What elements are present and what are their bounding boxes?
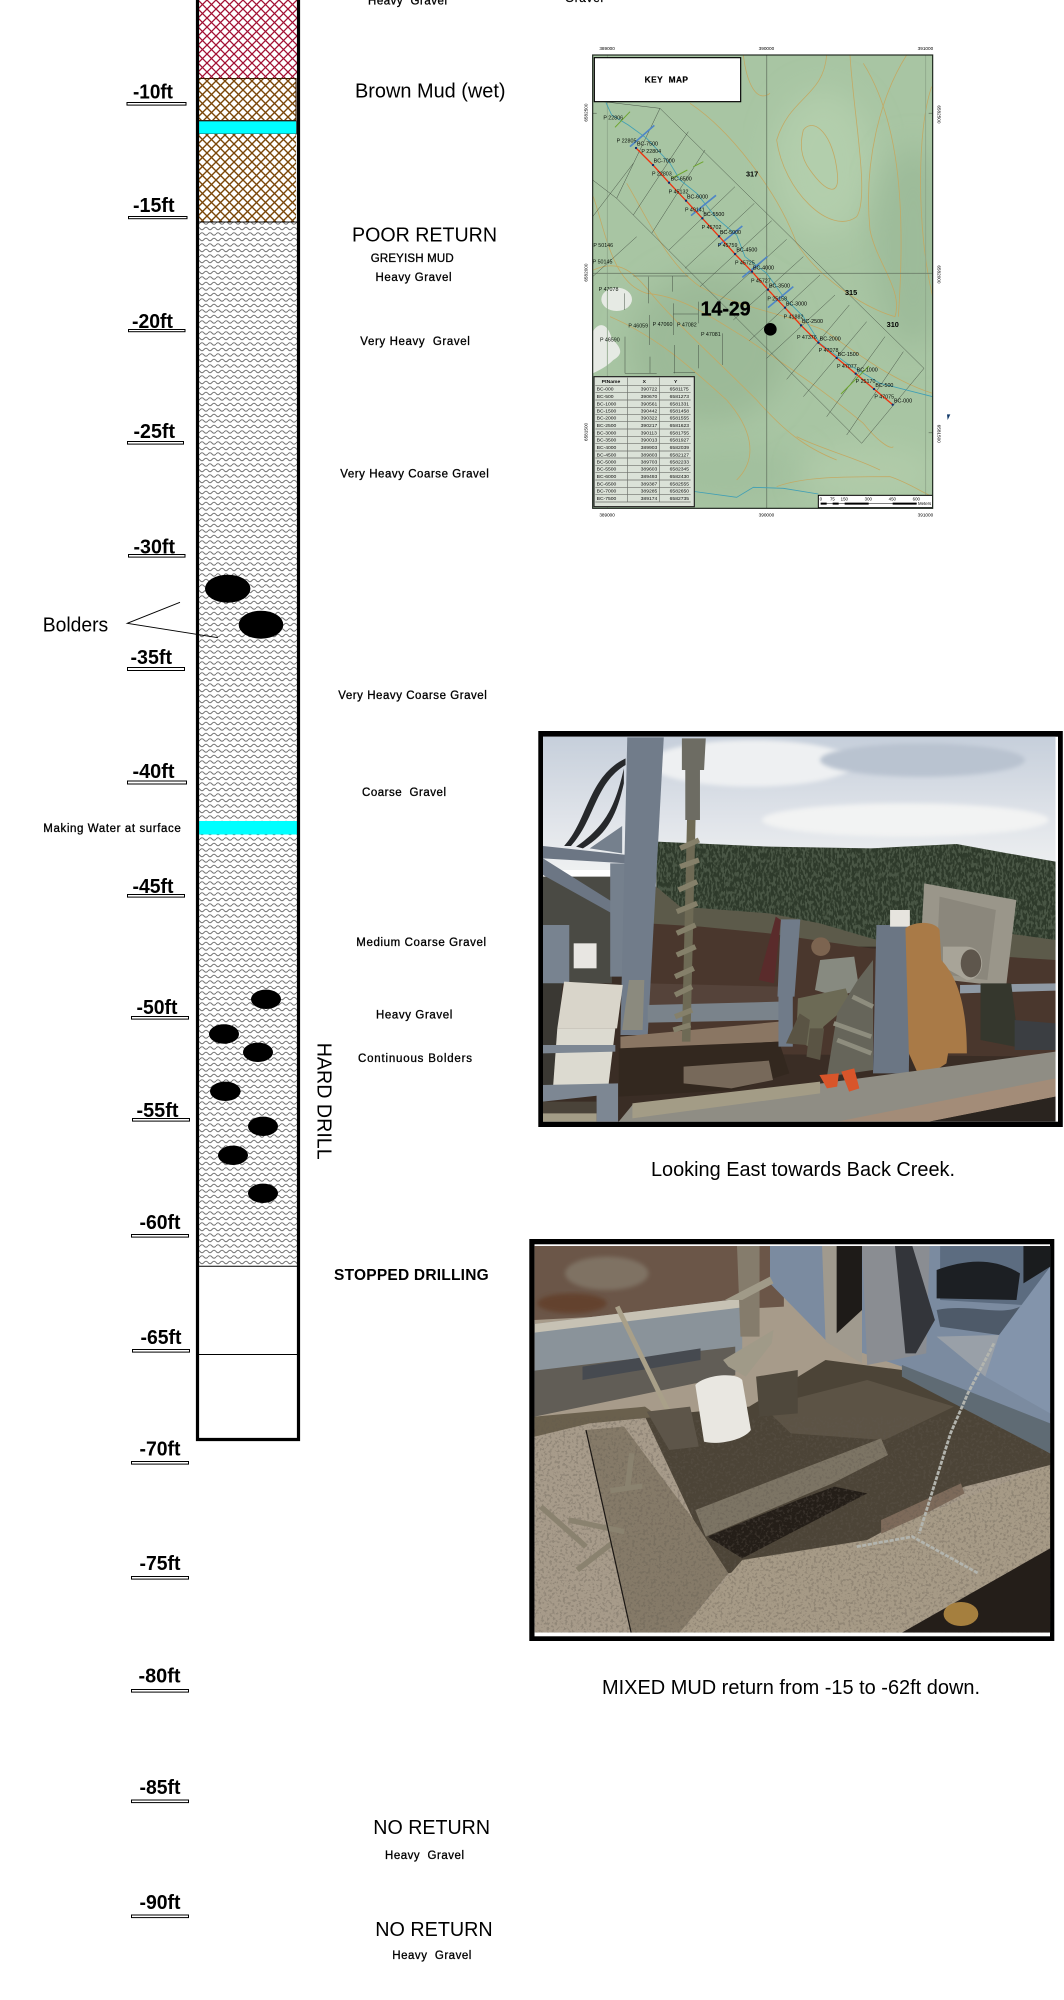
coordinates table: 6582735 (670, 496, 689, 502)
claim labels: P 47376 (797, 335, 817, 341)
coordinates table: 390217 (641, 423, 658, 429)
label: hard drill: HARD DRILL (312, 1043, 334, 1160)
scale bar (818, 495, 933, 508)
depth -20ft: -20ft (132, 311, 173, 333)
coordinates table: 6581623 (670, 423, 689, 429)
depth -75ft: -75ft (140, 1553, 181, 1575)
claim labels: P 45759 (718, 243, 737, 249)
drill hole marker (764, 323, 777, 336)
wood plank (680, 1465, 1050, 1633)
mud slab (695, 1438, 888, 1537)
note: no return second: NO RETURN (375, 1919, 493, 1941)
station labels (637, 142, 912, 405)
depth -70ft (132, 1439, 188, 1464)
coordinates table: 389903 (641, 445, 658, 451)
coordinates table: 389285 (641, 489, 658, 495)
coordinates table: BC-4500 (597, 452, 617, 458)
mud speckle (535, 1417, 1050, 1633)
coordinates table: 389387 (641, 481, 658, 487)
coordinates table: BC-5000 (597, 459, 617, 465)
depth -80ft: -80ft (138, 1666, 181, 1688)
coordinates table: 389703 (641, 459, 658, 465)
hole number: 14-29 (701, 299, 751, 321)
column walls (198, 0, 298, 1440)
layer: red mud (197, 0, 298, 78)
depth -10ft: -10ft (133, 82, 173, 104)
coordinates table: 390722 (641, 387, 658, 393)
claim labels: P 50145 (593, 259, 612, 265)
coordinates table: BC-3000 (597, 430, 617, 436)
depth scale (127, 82, 190, 1918)
coordinates table: 389174 (641, 496, 658, 502)
coordinates table: 389603 (641, 467, 658, 473)
claim labels: P 47077 (837, 364, 857, 370)
claim labels: P 46059 (628, 324, 648, 330)
coordinates table: BC-000 (597, 387, 614, 393)
concrete box (919, 883, 1016, 987)
coordinates table: BC-6500 (597, 481, 617, 487)
drill column (196, 0, 298, 1440)
claim labels: P 45702 (702, 225, 721, 231)
coordinates table: 389803 (641, 452, 658, 458)
coordinates table: Y (674, 379, 678, 385)
scale bar: 300 (865, 497, 872, 502)
coordinates table: 6581331 (670, 401, 689, 407)
map coordinate ticks (583, 46, 942, 518)
chain (857, 1343, 994, 1573)
scale bar: 75 (830, 497, 835, 502)
coordinates table: 390322 (641, 416, 658, 422)
key map title box (594, 58, 741, 102)
claim labels: P 25158 (767, 296, 787, 302)
left frame (543, 1045, 618, 1122)
station labels: BC-5000 (720, 230, 741, 236)
depth -90ft: -90ft (140, 1892, 181, 1914)
depth -75ft (132, 1553, 188, 1579)
depth -40ft (128, 761, 186, 784)
worker (786, 937, 859, 1060)
forested hill (656, 842, 1056, 947)
scale bar: 600 (913, 497, 920, 502)
station labels: BC-6500 (671, 177, 692, 183)
depth -40ft: -40ft (132, 761, 175, 783)
claim labels: P 45727 (751, 279, 771, 285)
key map title box: KEY MAP (645, 75, 688, 85)
claim labels: P 46590 (600, 337, 620, 343)
depth -30ft: -30ft (134, 536, 175, 558)
coordinates table: 6582127 (670, 452, 689, 458)
coordinates table: BC-6000 (597, 474, 617, 480)
depth -55ft: -55ft (136, 1100, 179, 1122)
note: medium coarse gravel: Medium Coarse Gravel (356, 937, 486, 949)
claim labels: P 45725 (735, 261, 755, 267)
claim labels: P 45132 (669, 189, 688, 195)
caption: mixed mud: MIXED MUD return from -15 to -62ft down. (602, 1677, 980, 1699)
layer: brown mud lower (197, 134, 296, 222)
scale bar: 450 (889, 497, 896, 502)
coordinates table: BC-2000 (597, 416, 617, 422)
note: heavy gravel second: Heavy Gravel (392, 1950, 471, 1962)
callout: bolders: Bolders (43, 615, 108, 637)
coordinates table: 390670 (641, 394, 658, 400)
note: coarse gravel: Coarse Gravel (362, 787, 446, 799)
claim lines (593, 102, 924, 443)
brush (654, 886, 876, 947)
depth -35ft (128, 647, 184, 670)
centre post (777, 919, 800, 1047)
left machine (543, 877, 612, 983)
note: poor return: POOR RETURN (352, 225, 497, 247)
map coordinate ticks: 390000 (759, 46, 775, 51)
coordinates table: 6582233 (670, 459, 689, 465)
tools (541, 1453, 642, 1570)
claim labels: P 47078 (599, 287, 618, 293)
station labels: BC-1000 (857, 368, 878, 374)
station labels: BC-7500 (637, 142, 658, 148)
coordinates table: 6581273 (670, 394, 689, 400)
depth -15ft (128, 195, 187, 219)
block numbers (746, 170, 899, 329)
drilling notes (334, 0, 603, 1962)
note: heavy gravel mid: Heavy Gravel (376, 1009, 452, 1021)
callout: bolders (43, 602, 218, 638)
coordinates table: BC-2500 (597, 423, 617, 429)
coordinates table: 6581458 (670, 409, 689, 415)
survey line (636, 148, 893, 405)
photo: mixed mud return (529, 1239, 1054, 1641)
white bucket (695, 1375, 751, 1443)
claim labels: P 41882 (784, 314, 803, 320)
brown jacket (905, 923, 967, 1080)
station labels: BC-1500 (838, 352, 859, 358)
depth -65ft (132, 1327, 190, 1352)
coordinates table: 6582345 (670, 467, 689, 473)
soil background (535, 1246, 784, 1320)
station labels: BC-6000 (687, 194, 708, 200)
claim labels: P 50146 (593, 243, 613, 249)
map coordinate ticks: 6581500 (937, 425, 942, 443)
map grid (607, 55, 926, 508)
depth -10ft (127, 82, 186, 105)
scale bar: 150 (841, 497, 848, 502)
claim labels: P 22806 (603, 116, 623, 122)
coordinates table: 6582430 (670, 474, 689, 480)
depth -70ft: -70ft (140, 1439, 181, 1461)
coordinates table: 6581175 (670, 387, 689, 393)
coordinates table: BC-500 (597, 394, 614, 400)
shovel (617, 1307, 668, 1410)
station labels: BC-500 (875, 383, 893, 389)
station labels: BC-000 (894, 399, 912, 405)
pipes (648, 1002, 779, 1023)
depth -45ft: -45ft (132, 876, 174, 898)
snow patches (601, 288, 632, 311)
depth -60ft (132, 1212, 188, 1237)
coordinates table: X (643, 379, 647, 385)
key map (583, 46, 953, 518)
right rail and black jacket (960, 983, 1056, 993)
pipe (535, 1298, 742, 1417)
claim labels: P 22803 (652, 172, 672, 178)
depth -85ft: -85ft (140, 1777, 181, 1799)
station labels: BC-5500 (703, 212, 724, 218)
coordinates table: 390013 (641, 438, 658, 444)
note: stopped drilling: STOPPED DRILLING (334, 1267, 489, 1284)
layer: brown mud upper (197, 78, 296, 120)
photo: looking east (538, 731, 1063, 1127)
boulders upper (205, 575, 283, 639)
note: no return first: NO RETURN (373, 1817, 490, 1839)
depth -35ft: -35ft (130, 647, 172, 669)
map coordinate ticks: 389000 (599, 46, 615, 51)
claim labels (593, 116, 894, 401)
layer boundaries (197, 222, 297, 1354)
depth -85ft (132, 1777, 188, 1803)
scale bar: Meters (918, 501, 931, 506)
claim labels: P 47082 (677, 322, 697, 328)
claim labels: P 47060 (653, 322, 672, 328)
claim labels: P 47078 (819, 348, 838, 354)
coordinates table: 6581755 (670, 430, 689, 436)
ground (648, 923, 1056, 1057)
map coordinate ticks: 6582000 (937, 265, 942, 284)
station labels: BC-7000 (654, 159, 675, 165)
plank seam (586, 1430, 631, 1633)
contours (593, 55, 933, 507)
station labels: BC-3000 (786, 301, 807, 307)
note: heavy gravel: Heavy Gravel (376, 272, 452, 284)
map coordinate ticks: 6582500 (583, 103, 588, 122)
claim labels: P 47075 (874, 395, 894, 401)
coordinates table (594, 377, 694, 507)
coordinates table: BC-7500 (597, 496, 617, 502)
block numbers: 317 (746, 170, 758, 179)
map coordinate ticks: 6581500 (583, 422, 588, 441)
depth -90ft (132, 1892, 188, 1918)
coordinates table: BC-5500 (597, 467, 617, 473)
auger (682, 738, 706, 820)
coordinates table: BC-4000 (597, 445, 617, 451)
station labels: BC-3500 (769, 284, 790, 290)
caption: looking east: Looking East towards Back Creek. (651, 1159, 955, 1181)
map coordinate ticks: 6582000 (583, 263, 588, 282)
note: very heavy coarse gravel: Very Heavy Coarse Gravel (340, 468, 489, 480)
crossing lines (630, 125, 793, 308)
mast (620, 737, 664, 1035)
coordinates table: 389493 (641, 474, 658, 480)
dark ground (620, 1042, 784, 1054)
depth -50ft: -50ft (136, 997, 178, 1019)
map coordinate ticks: 391000 (918, 513, 934, 518)
block numbers: 310 (887, 320, 899, 329)
north arrow fragment (947, 414, 950, 420)
bucket (543, 983, 562, 1087)
station labels: BC-2000 (820, 337, 841, 343)
ground mud (645, 1360, 1050, 1573)
depth -60ft: -60ft (140, 1212, 181, 1234)
depth -25ft: -25ft (134, 421, 175, 443)
note: very heavy gravel: Very Heavy Gravel (360, 336, 470, 348)
auger stack (827, 960, 873, 1077)
bottom pipes (619, 1052, 1056, 1122)
map coordinate ticks: 389000 (599, 513, 615, 518)
coordinates table: 6581927 (670, 438, 689, 444)
layer: water seam lower (196, 821, 297, 834)
depth -65ft: -65ft (140, 1327, 182, 1349)
block numbers: 315 (845, 288, 857, 297)
claim labels: P 49141 (685, 207, 705, 213)
claim labels: P 47081 (701, 332, 721, 338)
station labels: BC-2500 (802, 319, 823, 325)
auger (737, 1246, 760, 1337)
machine frame (770, 1246, 1050, 1453)
claim labels: P 22805 (617, 139, 636, 145)
station labels: BC-4500 (736, 248, 757, 254)
gloves (819, 1068, 859, 1092)
coordinates table: 6582650 (670, 489, 689, 495)
depth -80ft (132, 1666, 188, 1692)
boulders lower (209, 990, 281, 1203)
station labels: BC-4000 (753, 266, 774, 272)
coordinates table: 6581555 (670, 416, 689, 422)
streams (606, 103, 933, 397)
scale bar: 0 (820, 497, 823, 502)
coordinates table: BC-1000 (597, 401, 617, 407)
depth -15ft: -15ft (133, 195, 175, 217)
claim labels: P 25170 (856, 379, 875, 385)
coordinates table: PtName (602, 379, 620, 385)
coordinates table: 6582555 (670, 481, 689, 487)
coordinates table: BC-7000 (597, 489, 617, 495)
coordinates table: 390561 (641, 401, 658, 407)
right post (873, 925, 911, 1073)
note: heavy gravel first: Heavy Gravel (385, 1850, 464, 1862)
coordinates table: BC-1500 (597, 409, 617, 415)
coordinates table: 390113 (641, 430, 657, 436)
map coordinate ticks: 6582500 (937, 105, 942, 124)
note: brown mud: Brown Mud (wet) (355, 81, 506, 103)
map coordinate ticks: 390000 (759, 513, 775, 518)
claim labels: P 22804 (641, 149, 661, 155)
coordinates table: BC-3500 (597, 438, 617, 444)
coordinates table: 390442 (641, 409, 658, 415)
note: greyish mud: GREYISH MUD (371, 253, 454, 265)
layer: water seam upper (197, 121, 296, 134)
layer: gravel (198, 222, 297, 1266)
note: very heavy coarse gravel lower: Very Heavy Coarse Gravel (338, 690, 487, 702)
left box and filter (543, 925, 569, 983)
note: continuous bolders: Continuous Bolders (358, 1053, 472, 1065)
label: making water: Making Water at surface (43, 823, 181, 835)
coordinates table: 6582039 (670, 445, 689, 451)
map coordinate ticks: 391000 (918, 46, 934, 51)
